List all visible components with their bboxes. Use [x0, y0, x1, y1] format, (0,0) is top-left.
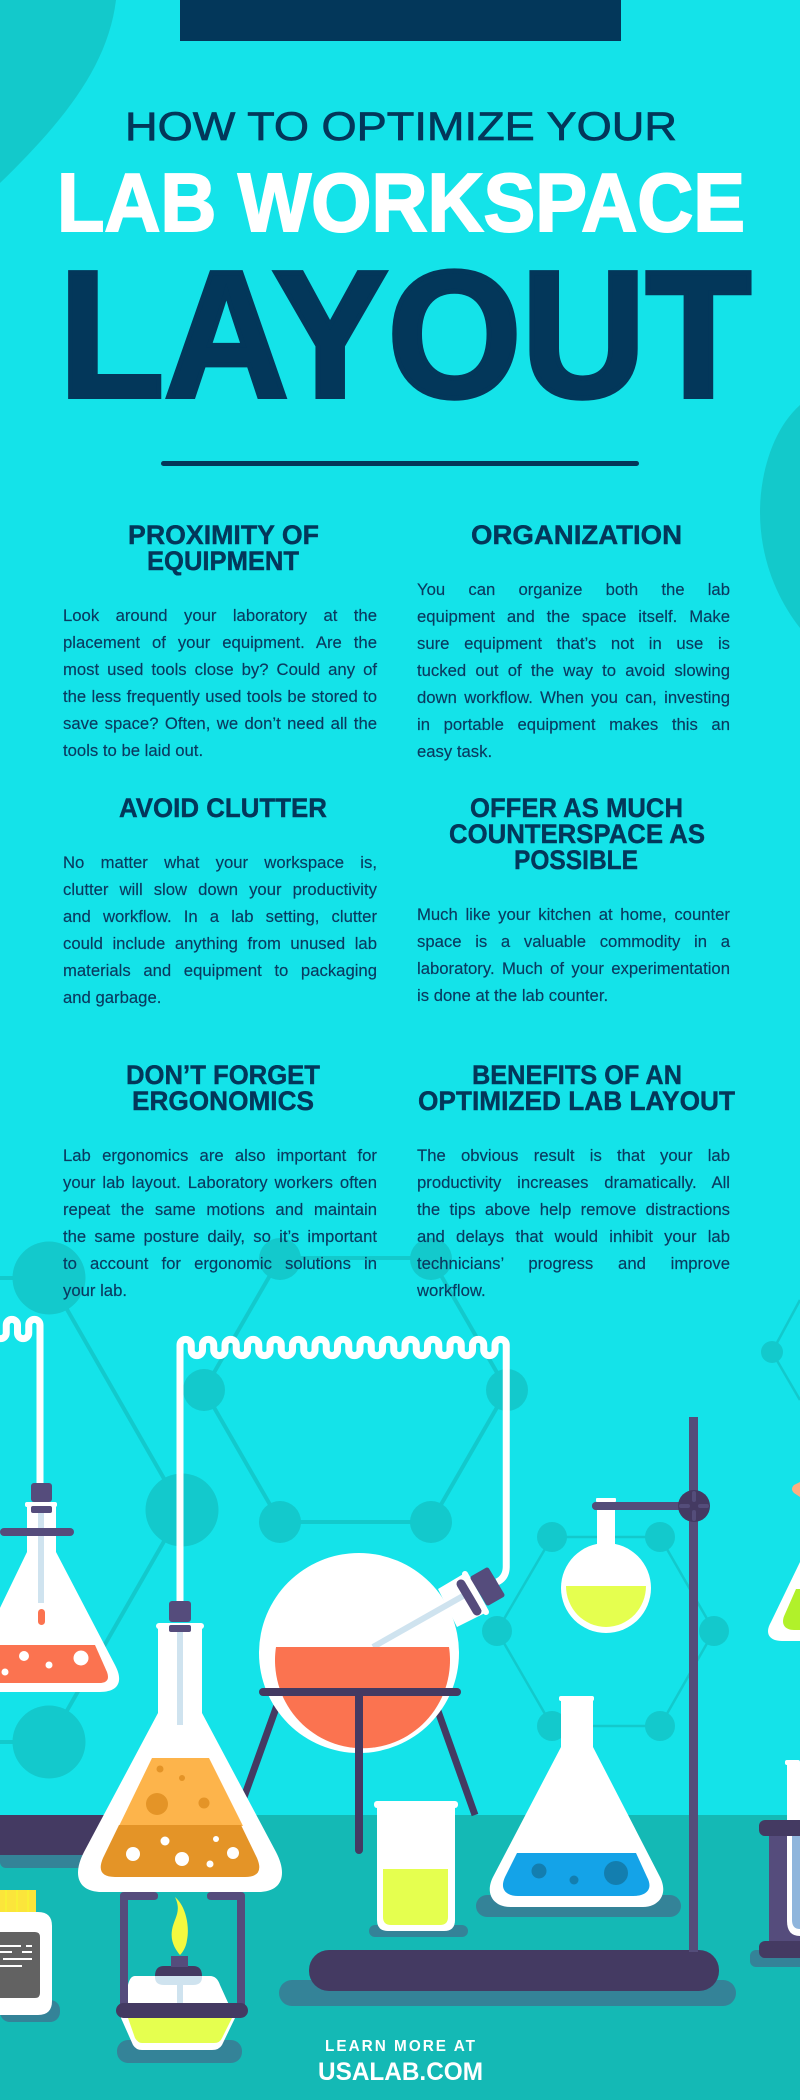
heading: don't forget ergonomics: DON’T FORGET [126, 1060, 320, 1090]
text block: benefits [416, 1146, 730, 1300]
text block: proximity of equipment: save space? Often, we don’t need all the [63, 714, 377, 733]
right partial flask [768, 1562, 800, 1641]
title line 3: LAYOUT [59, 234, 751, 436]
text block: avoid clutter: and garbage. [63, 988, 161, 1007]
text block: benefits: workflow. [417, 1281, 486, 1300]
footer call to action [318, 2038, 483, 2086]
text block: avoid clutter: clutter will slow down your productivity [63, 880, 377, 899]
blue erlenmeyer flask [476, 1696, 681, 1917]
text block: avoid clutter: No matter what your workspace is, [63, 853, 377, 872]
text block: benefits: productivity increases dramatically. All [417, 1173, 730, 1192]
text block: counterspace: is done at the lab counter. [417, 986, 608, 1005]
text block: avoid clutter: could include anything from unused lab [63, 934, 377, 953]
text block: organization: sure equipment that’s not in use is [417, 634, 730, 653]
text block: ergonomics: your lab. [63, 1281, 127, 1300]
text block: benefits: and delays that would inhibit your lab [417, 1227, 730, 1246]
text block: avoid clutter: and workflow. In a lab setting, clutter [63, 907, 377, 926]
footer call to action: USALAB.COM [318, 2058, 483, 2086]
beaker with yellow liquid [369, 1801, 468, 1937]
heading: proximity of equipment: PROXIMITY OF [128, 520, 319, 550]
text block: proximity of equipment: most used tools close by? Could any of [63, 660, 377, 679]
text block: organization: You can organize both the lab [417, 580, 730, 599]
small round flask [561, 1498, 651, 1633]
text block: organization: equipment and the space itself. Make [417, 607, 730, 626]
text block: proximity of equipment: tools to be laid out. [63, 741, 203, 760]
text block: ergonomics: repeat the same motions and maintain [63, 1200, 377, 1219]
burner with flame and stand [116, 1892, 248, 2063]
text block: proximity of equipment: Look around your laboratory at the [63, 606, 377, 625]
heading: don't forget ergonomics: ERGONOMICS [132, 1086, 314, 1116]
text block: avoid clutter: materials and equipment to packaging [63, 961, 377, 980]
heading: proximity of equipment [128, 520, 319, 576]
text block: ergonomics: to account for ergonomic solutions in [63, 1254, 377, 1273]
title divider [161, 461, 639, 466]
title line 2: LAB WORKSPACE [57, 156, 745, 249]
text block: ergonomics: your lab layout. Laboratory workers often [63, 1173, 377, 1192]
text block: benefits: The obvious result is that your lab [417, 1146, 730, 1165]
text block: proximity of equipment: the less frequently used tools be stored to [63, 687, 377, 706]
heading: offer as much counterspace as possible [449, 793, 705, 875]
text block: avoid clutter [63, 853, 377, 1007]
text block: organization [417, 580, 730, 761]
tripod top bar and centre leg [259, 1688, 461, 1854]
text block: benefits: the tips above help remove distractions [417, 1200, 730, 1219]
round bottom flask on tripod [259, 1553, 502, 1753]
floor [0, 1815, 800, 2100]
text block: proximity of equipment: placement of your equipment. Are the [63, 633, 377, 652]
heading: organization: ORGANIZATION [471, 520, 682, 550]
text block: organization: tucked out of the way to avoid slowing [417, 661, 730, 680]
text block: organization: down workflow. When you can, investing [417, 688, 730, 707]
molecule network background [0, 1238, 800, 1778]
bottle [0, 1890, 60, 2022]
heading: benefits of an optimized lab layout [418, 1060, 735, 1116]
text block: ergonomics [63, 1146, 377, 1300]
retort stand with clamp [592, 1417, 710, 1952]
text block: counterspace [417, 905, 730, 1005]
coil tube [180, 1339, 506, 1603]
heading: offer as much counterspace as possible: OFFER AS MUCH [470, 793, 683, 823]
text block: benefits: technicians’ progress and improve [417, 1254, 730, 1273]
heading: offer as much counterspace as possible: COUNTERSPACE AS [449, 819, 705, 849]
hand fragment [792, 1482, 800, 1497]
heading: benefits of an optimized lab layout: BENEFITS OF AN [472, 1060, 682, 1090]
base plate of stand [279, 1950, 736, 2006]
title line 1: HOW TO OPTIMIZE YOUR [125, 105, 677, 149]
left partial flask [0, 1483, 119, 1692]
heading: benefits of an optimized lab layout: OPTIMIZED LAB LAYOUT [418, 1086, 735, 1116]
text block: organization: easy task. [417, 742, 492, 761]
text block: ergonomics: Lab ergonomics are also important for [63, 1146, 377, 1165]
background blob right [760, 405, 800, 628]
text block: ergonomics: the same posture daily, so it’s important [63, 1227, 377, 1246]
right test tube rack [750, 1760, 800, 1967]
text block: counterspace: Much like your kitchen at home, counter [417, 905, 730, 924]
text block: organization: in portable equipment makes this an [417, 715, 730, 734]
title [57, 105, 751, 436]
text block: proximity of equipment [63, 606, 378, 760]
text block: counterspace: laboratory. Much of your experimentation [417, 959, 730, 978]
heading: avoid clutter: AVOID CLUTTER [119, 793, 327, 823]
left coil tube [0, 1319, 40, 1485]
heading: offer as much counterspace as possible: POSSIBLE [514, 845, 638, 875]
text block: counterspace: space is a valuable commodity in a [417, 932, 730, 951]
footer call to action: LEARN MORE AT [325, 2038, 476, 2055]
tripod back legs [243, 1697, 475, 1815]
left counter bar [0, 1815, 115, 1868]
heading: don't forget ergonomics [126, 1060, 320, 1116]
orange erlenmeyer flask [78, 1601, 282, 1892]
background blob top left [0, 0, 116, 183]
heading: proximity of equipment: EQUIPMENT [147, 546, 299, 576]
top banner bar [180, 0, 621, 41]
